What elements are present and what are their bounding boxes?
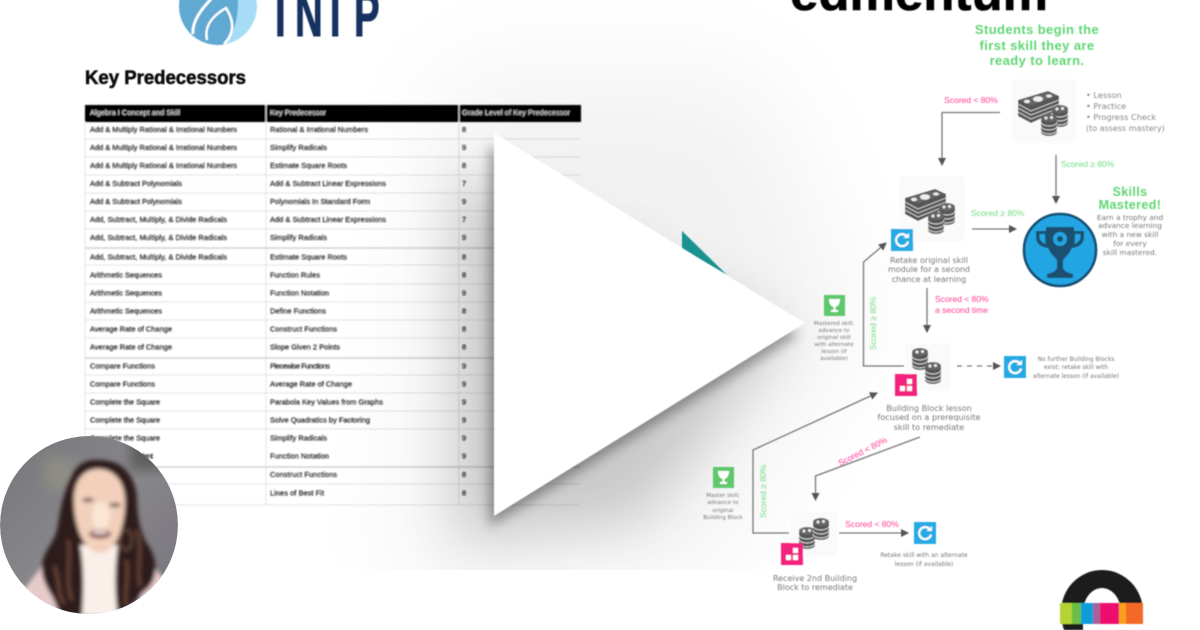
skills mastered description: skill mastered. (1103, 248, 1157, 257)
table rows text: 8 (462, 161, 466, 170)
master skill note: original (713, 508, 734, 514)
table rows text: 9 (462, 434, 466, 442)
table rows text: 9 (462, 143, 466, 152)
no further building blocks note: alternate lesson (if available) (1033, 374, 1119, 380)
building block description: Building Block lesson (886, 403, 972, 413)
lesson bullet list: • Progress Check (1086, 112, 1156, 122)
label: scored at least 80 retake: Scored ≥ 80% (971, 208, 1025, 218)
table rows text: 9 (462, 380, 466, 388)
table rows text: Add & Subtract Linear Expressions (270, 179, 386, 188)
face (74, 469, 125, 553)
skills mastered description: for every (1113, 239, 1147, 248)
teal shape behind the play button (682, 231, 727, 275)
master skill note: advance to (707, 500, 739, 506)
mastered note: available) (820, 356, 848, 362)
table rows text: Function Rules (270, 270, 320, 280)
building block description (877, 403, 981, 432)
table rows text: 9 (462, 362, 466, 370)
icon: retake final (914, 522, 936, 544)
no further building blocks note: No further Building Blocks (1038, 357, 1114, 363)
icon: flame in circle (170, 0, 257, 46)
pink top (24, 563, 164, 610)
second block description (773, 574, 857, 592)
neck and chest (80, 545, 118, 616)
label: diagonal scored below 80: Scored < 80% (836, 434, 889, 468)
building block description: focused on a prerequisite (877, 412, 981, 422)
table rows text: Add, Subtract, Multiply, & Divide Radicals (90, 215, 227, 224)
table rows text: Slope Given 2 Points (270, 342, 340, 352)
icon: pink blocks 2 (781, 543, 803, 565)
table rows text: Construct Functions (270, 470, 337, 479)
master skill note: Building Block (703, 515, 744, 521)
table rows text: Add & Multiply Rational & Irrational Numbers (90, 125, 237, 134)
table rows text: Arithmetic Sequences (90, 306, 162, 316)
mastered note: Mastered skill; (814, 321, 854, 327)
flow diagram: learning path (703, 22, 1165, 592)
table rows text: Compare Functions (90, 380, 155, 388)
table rows text: Constant & Coefficient (90, 452, 153, 460)
retake description (888, 256, 970, 284)
table rows text: Average Rate of Change (270, 380, 352, 388)
label: vertical scored at least 80 second: Scored ≥ 80% (758, 464, 768, 518)
INIP logo (178, 0, 380, 46)
lesson bullet list: • Lesson (1086, 90, 1122, 100)
heading: students begin: ready to learn. (990, 53, 1084, 68)
table rows text: 9 (462, 288, 466, 298)
table rows text: Add & Subtract Polynomials (90, 197, 182, 206)
table rows text: Linear Models (90, 488, 137, 498)
table rows text: 9 (462, 452, 466, 460)
colored e logo (1060, 570, 1143, 630)
icon: retake blue (891, 229, 913, 251)
arrow: lesson to mastered (1055, 155, 1057, 203)
table rows text: Add & Multiply Rational & Irrational Numbers (90, 161, 237, 170)
lesson bullet list: • Practice (1086, 101, 1126, 111)
table rows text: Lines of Best Fit (270, 488, 324, 498)
table rows text: Add & Multiply Rational & Irrational Numbers (90, 143, 237, 152)
table rows text: 8 (462, 324, 466, 334)
retake alternate note (880, 552, 968, 568)
table rows text: Construct Functions (270, 324, 337, 334)
table rows text: Piecewise Functions (270, 362, 330, 370)
table rows text: Define Functions (270, 306, 326, 316)
lesson bullet list (1086, 90, 1165, 133)
table rows text: Add, Subtract, Multiply, & Divide Radicals (90, 233, 227, 242)
skills mastered description: advance learning (1098, 221, 1162, 230)
heading: skills mastered: Skills (1112, 185, 1148, 199)
retake alternate note: lesson (if available) (895, 561, 953, 568)
table rows text: Solve Quadratics by Factoring (270, 416, 370, 424)
tile: second building block (791, 512, 838, 557)
table rows text: Compare Functions (90, 362, 155, 370)
label: scored below 80 second time: Scored < 80% (935, 294, 989, 304)
retake description: module for a second (888, 265, 970, 274)
hair (42, 460, 155, 616)
table header row: Algebra I Concept and Skill (90, 108, 180, 117)
table rows text: Arithmetic Sequences (90, 288, 162, 298)
label: vertical scored at least 80: Scored ≥ 80% (868, 296, 878, 350)
table rows text: Average Rate of Change (90, 324, 172, 334)
table rows text: Add & Subtract Polynomials (90, 179, 182, 188)
table rows text: 8 (462, 270, 466, 280)
table rows text: Parabola Key Values from Graphs (270, 398, 383, 406)
mastered note: with alternate (814, 342, 854, 348)
label: scored below 80 second time: a second time (935, 305, 988, 315)
icon: trophy badge (1024, 214, 1096, 286)
mastered note: advance to (818, 328, 850, 334)
table rows text: Rational & Irrational Numbers (270, 125, 368, 134)
no further building blocks note: exist; retake skill with (1044, 365, 1108, 371)
skills mastered description: Earn a trophy and (1097, 213, 1163, 222)
label: scored below 80: Scored < 80% (944, 95, 998, 105)
table rows text: Simplify Radicals (270, 434, 327, 442)
play button triangle (494, 133, 805, 516)
second block description: Block to remediate (777, 583, 853, 592)
table rows text: Estimate Square Roots (270, 252, 347, 262)
heading: students begin (975, 22, 1099, 68)
heading: skills mastered: Mastered! (1099, 198, 1161, 212)
icon: retake alternate (1004, 356, 1026, 378)
table rows text: 8 (462, 488, 466, 498)
mastered note: original skill (817, 335, 851, 341)
arrow: retake to mastered (972, 228, 1016, 230)
arrow: lesson to retake (942, 112, 1000, 165)
table rows text: 7 (462, 215, 466, 224)
skills mastered description (1097, 213, 1163, 257)
table header row: Grade Level of Key Predecessor (462, 108, 571, 117)
table rows text (90, 125, 466, 498)
table rows text: Complete the Square (90, 434, 160, 442)
retake description: chance at learning (892, 275, 966, 284)
table rows text: Simplify Radicals (270, 143, 327, 152)
table rows text: Construct Functions (90, 470, 156, 479)
tile: retake module (899, 176, 965, 242)
lesson bullet list: (to assess mastery) (1086, 124, 1165, 133)
arrow: retake to building block (926, 288, 928, 332)
play button shadow (410, 90, 826, 570)
table rows text: Add, Subtract, Multiply, & Divide Radicals (90, 252, 227, 262)
table grid lines (85, 105, 580, 505)
table rows text: 7 (462, 179, 466, 188)
retake description: Retake original skill (890, 256, 968, 265)
table rows text: 9 (462, 416, 466, 424)
no further building blocks note (1033, 357, 1119, 380)
arrow: return to retake (864, 243, 904, 366)
table rows text: 9 (462, 398, 466, 406)
black e ring (1061, 570, 1143, 630)
table rows text: 8 (462, 125, 466, 134)
skills mastered description: with a new skill (1102, 230, 1158, 239)
master skill note: Master skill; (706, 493, 740, 499)
table heading: Key Predecessors: Key Predecessors (85, 67, 246, 89)
table rows text: 8 (462, 306, 466, 316)
retake alternate note: Retake skill with an alternate (880, 552, 968, 559)
presenter portrait (0, 436, 190, 616)
heading: students begin: Students begin the (975, 22, 1099, 37)
table rows text: Estimate Square Roots (270, 161, 347, 170)
mastered note (814, 321, 854, 362)
table rows text: 9 (462, 233, 466, 242)
table rows text: Complete the Square (90, 398, 160, 406)
table rows text: 8 (462, 342, 466, 352)
table: key predecessors list (85, 105, 581, 505)
tile: lesson module (1012, 79, 1076, 143)
table rows text: Average Rate of Change (90, 342, 172, 352)
table rows text: Polynomials In Standard Form (270, 197, 370, 206)
table rows text: Simplify Radicals (270, 233, 327, 242)
table rows text: Function Notation (270, 288, 329, 298)
table rows text: Add & Subtract Linear Expressions (270, 215, 386, 224)
arrow: dashed to alternate (957, 365, 1000, 367)
table header row (85, 105, 581, 122)
table rows text: 9 (462, 197, 466, 206)
table rows text: 8 (462, 252, 466, 262)
mastered note: lesson (if (821, 349, 848, 355)
color band (1060, 603, 1143, 624)
master skill note (703, 493, 744, 521)
heading: students begin: first skill they are (980, 38, 1094, 53)
icon: green trophy 2 (713, 467, 734, 488)
arrow: building block to second block (816, 437, 920, 500)
label: scored below 80 second time (935, 294, 989, 315)
icon: pink blocks 1 (895, 374, 917, 396)
label: scored below 80 bottom: Scored < 80% (845, 519, 899, 529)
table header row: Key Predecessor (270, 108, 327, 117)
table rows text: Function Notation (270, 452, 329, 460)
arrow: second block back to building block (753, 393, 877, 533)
table rows text: Complete the Square (90, 416, 160, 424)
tile: building block lesson (905, 343, 951, 390)
icon: green trophy 1 (824, 295, 845, 316)
table rows text: 8 (462, 470, 466, 479)
arrow: second block to alternate (839, 532, 908, 534)
label: scored at least 80: Scored ≥ 80% (1061, 159, 1115, 169)
second block description: Receive 2nd Building (773, 574, 857, 583)
table rows text: Arithmetic Sequences (90, 270, 162, 280)
heading: skills mastered (1099, 185, 1161, 212)
building block description: skill to remediate (894, 422, 964, 432)
